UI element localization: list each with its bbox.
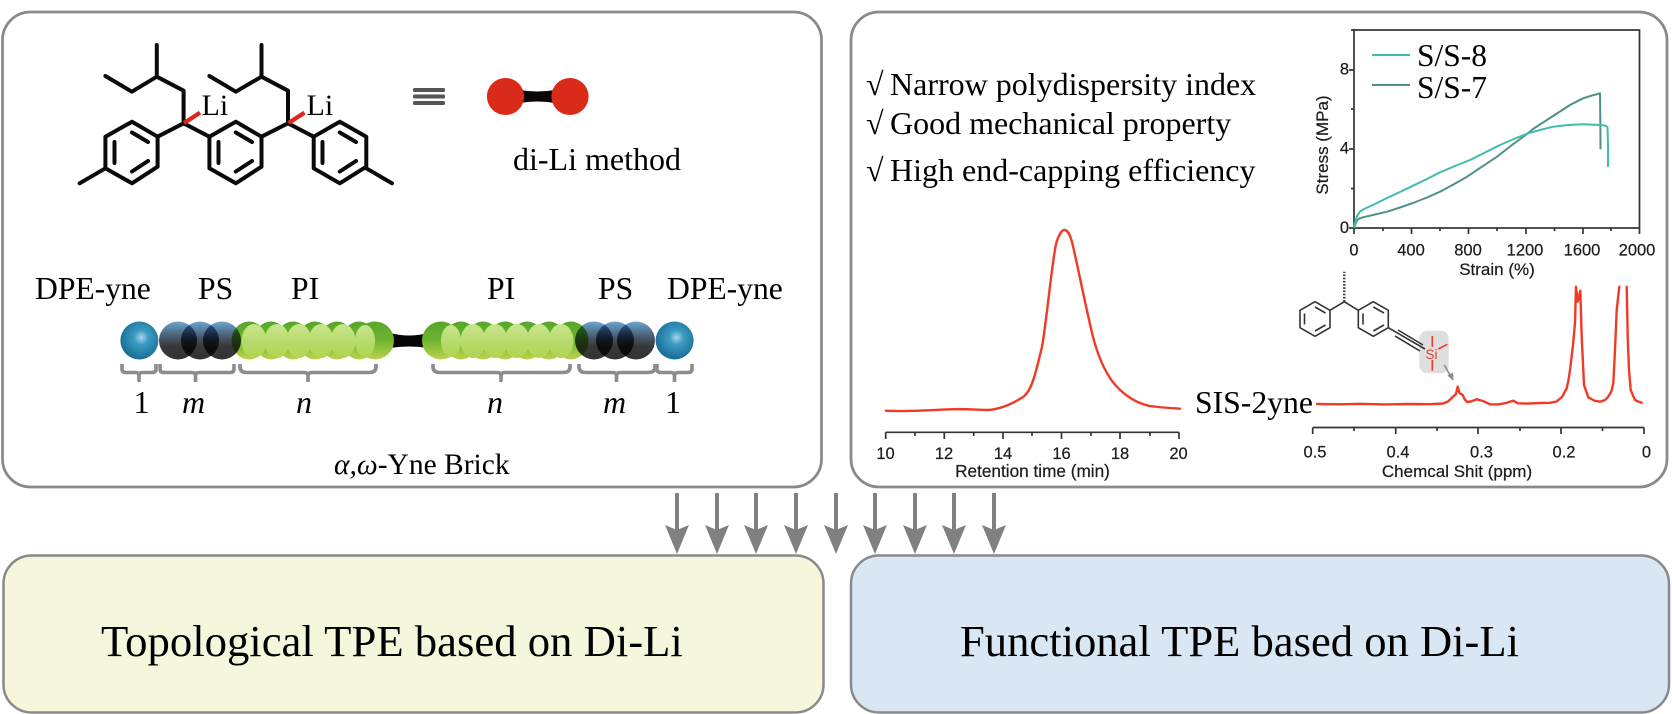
bead chain labels (35, 271, 783, 306)
chart legend: S/S-8 (1417, 38, 1487, 73)
checklist of properties: √ (866, 152, 884, 188)
chart: GPC retention-time curve: 14 (994, 445, 1012, 463)
chart: stress-strain curves: 0 (1340, 219, 1349, 237)
chart: stress-strain curves (1313, 30, 1655, 279)
chart: GPC retention-time curve: Retention time (min) (955, 461, 1110, 481)
di-Li initiator chemical structure: Li (306, 89, 333, 122)
chart: GPC retention-time curve: 20 (1169, 445, 1188, 463)
di-Li initiator chemical structure (80, 45, 392, 183)
label: SIS-2yne: SIS-2yne (1195, 385, 1313, 420)
chart: stress-strain curves: 400 (1397, 242, 1425, 260)
chart legend: S/S-7 (1417, 70, 1487, 105)
bead chain labels: DPE-yne (667, 271, 783, 306)
repeat-unit braces (122, 364, 692, 382)
panel: di-Li initiator and alpha,omega-yne brick (2, 12, 822, 487)
bead chain labels: PI (487, 271, 515, 306)
box label: Topological TPE: Topological TPE based on Di-Li (101, 616, 683, 666)
chart: NMR spectrum: 0.4 (1387, 444, 1409, 462)
box: Topological TPE (4, 556, 824, 712)
checklist of properties: √ (866, 105, 884, 141)
chart: stress-strain curves: 0 (1349, 242, 1359, 260)
icon: red dumbbell di-Li (487, 78, 589, 115)
chart: stress-strain curves: Strain (%) (1459, 260, 1535, 279)
chart: NMR spectrum: 0.3 (1470, 444, 1493, 462)
bead chain: triblock polymer (120, 322, 694, 360)
chart legend (1372, 38, 1487, 105)
chart: NMR spectrum: 0 (1642, 444, 1651, 462)
checklist of properties: √ (866, 66, 884, 102)
repeat-unit counts: n (487, 384, 503, 420)
repeat-unit counts: m (182, 384, 205, 420)
checklist of properties (866, 66, 1256, 188)
bead chain labels: PS (198, 271, 233, 306)
chart: GPC retention-time curve: 18 (1111, 445, 1129, 463)
repeat-unit counts: 1 (134, 384, 150, 420)
chart: stress-strain curves: 8 (1340, 60, 1349, 78)
chart: NMR spectrum: 0.5 (1304, 444, 1326, 462)
bead chain labels: PS (598, 271, 633, 306)
equivalence sign (413, 88, 445, 105)
repeat-unit counts (134, 384, 681, 420)
end-group chemical structure with silyl highlight: Si (1426, 347, 1438, 362)
end-group chemical structure with silyl highlight (1300, 272, 1454, 381)
chart: stress-strain curves: 4 (1340, 140, 1349, 158)
chart: stress-strain curves: Stress (MPa) (1313, 95, 1332, 195)
chart: NMR spectrum (1304, 287, 1651, 481)
chart: GPC retention-time curve (876, 230, 1188, 481)
chart: stress-strain curves: 1200 (1507, 242, 1543, 260)
chart: stress-strain curves: 1600 (1564, 242, 1600, 260)
chart: GPC retention-time curve: 12 (935, 445, 953, 463)
box: Functional TPE (851, 556, 1669, 712)
chart: stress-strain curves: 800 (1454, 242, 1482, 260)
checklist of properties: Narrow polydispersity index (890, 66, 1256, 102)
repeat-unit counts: 1 (665, 384, 681, 420)
arrows pointing down to bottom boxes (665, 493, 1006, 554)
panel: characterization results (851, 12, 1667, 487)
label: di-Li method: di-Li method (513, 141, 681, 177)
di-Li initiator chemical structure: Li (202, 89, 228, 122)
caption: alpha,omega-yne brick: α,ω-Yne Brick (334, 449, 510, 481)
bead chain labels: PI (291, 271, 319, 306)
checklist of properties: Good mechanical property (890, 105, 1231, 141)
repeat-unit counts: n (296, 384, 312, 420)
repeat-unit counts: m (603, 384, 626, 420)
chart: GPC retention-time curve: 16 (1052, 445, 1071, 463)
chart: NMR spectrum: 0.2 (1553, 444, 1575, 462)
checklist of properties: High end-capping efficiency (890, 152, 1255, 188)
chart: GPC retention-time curve: 10 (876, 445, 895, 463)
chart: stress-strain curves: 2000 (1619, 242, 1655, 260)
box label: Functional TPE: Functional TPE based on Di-Li (960, 616, 1519, 666)
bead chain labels: DPE-yne (35, 271, 151, 306)
chart: NMR spectrum: Chemcal Shit (ppm) (1382, 462, 1532, 481)
